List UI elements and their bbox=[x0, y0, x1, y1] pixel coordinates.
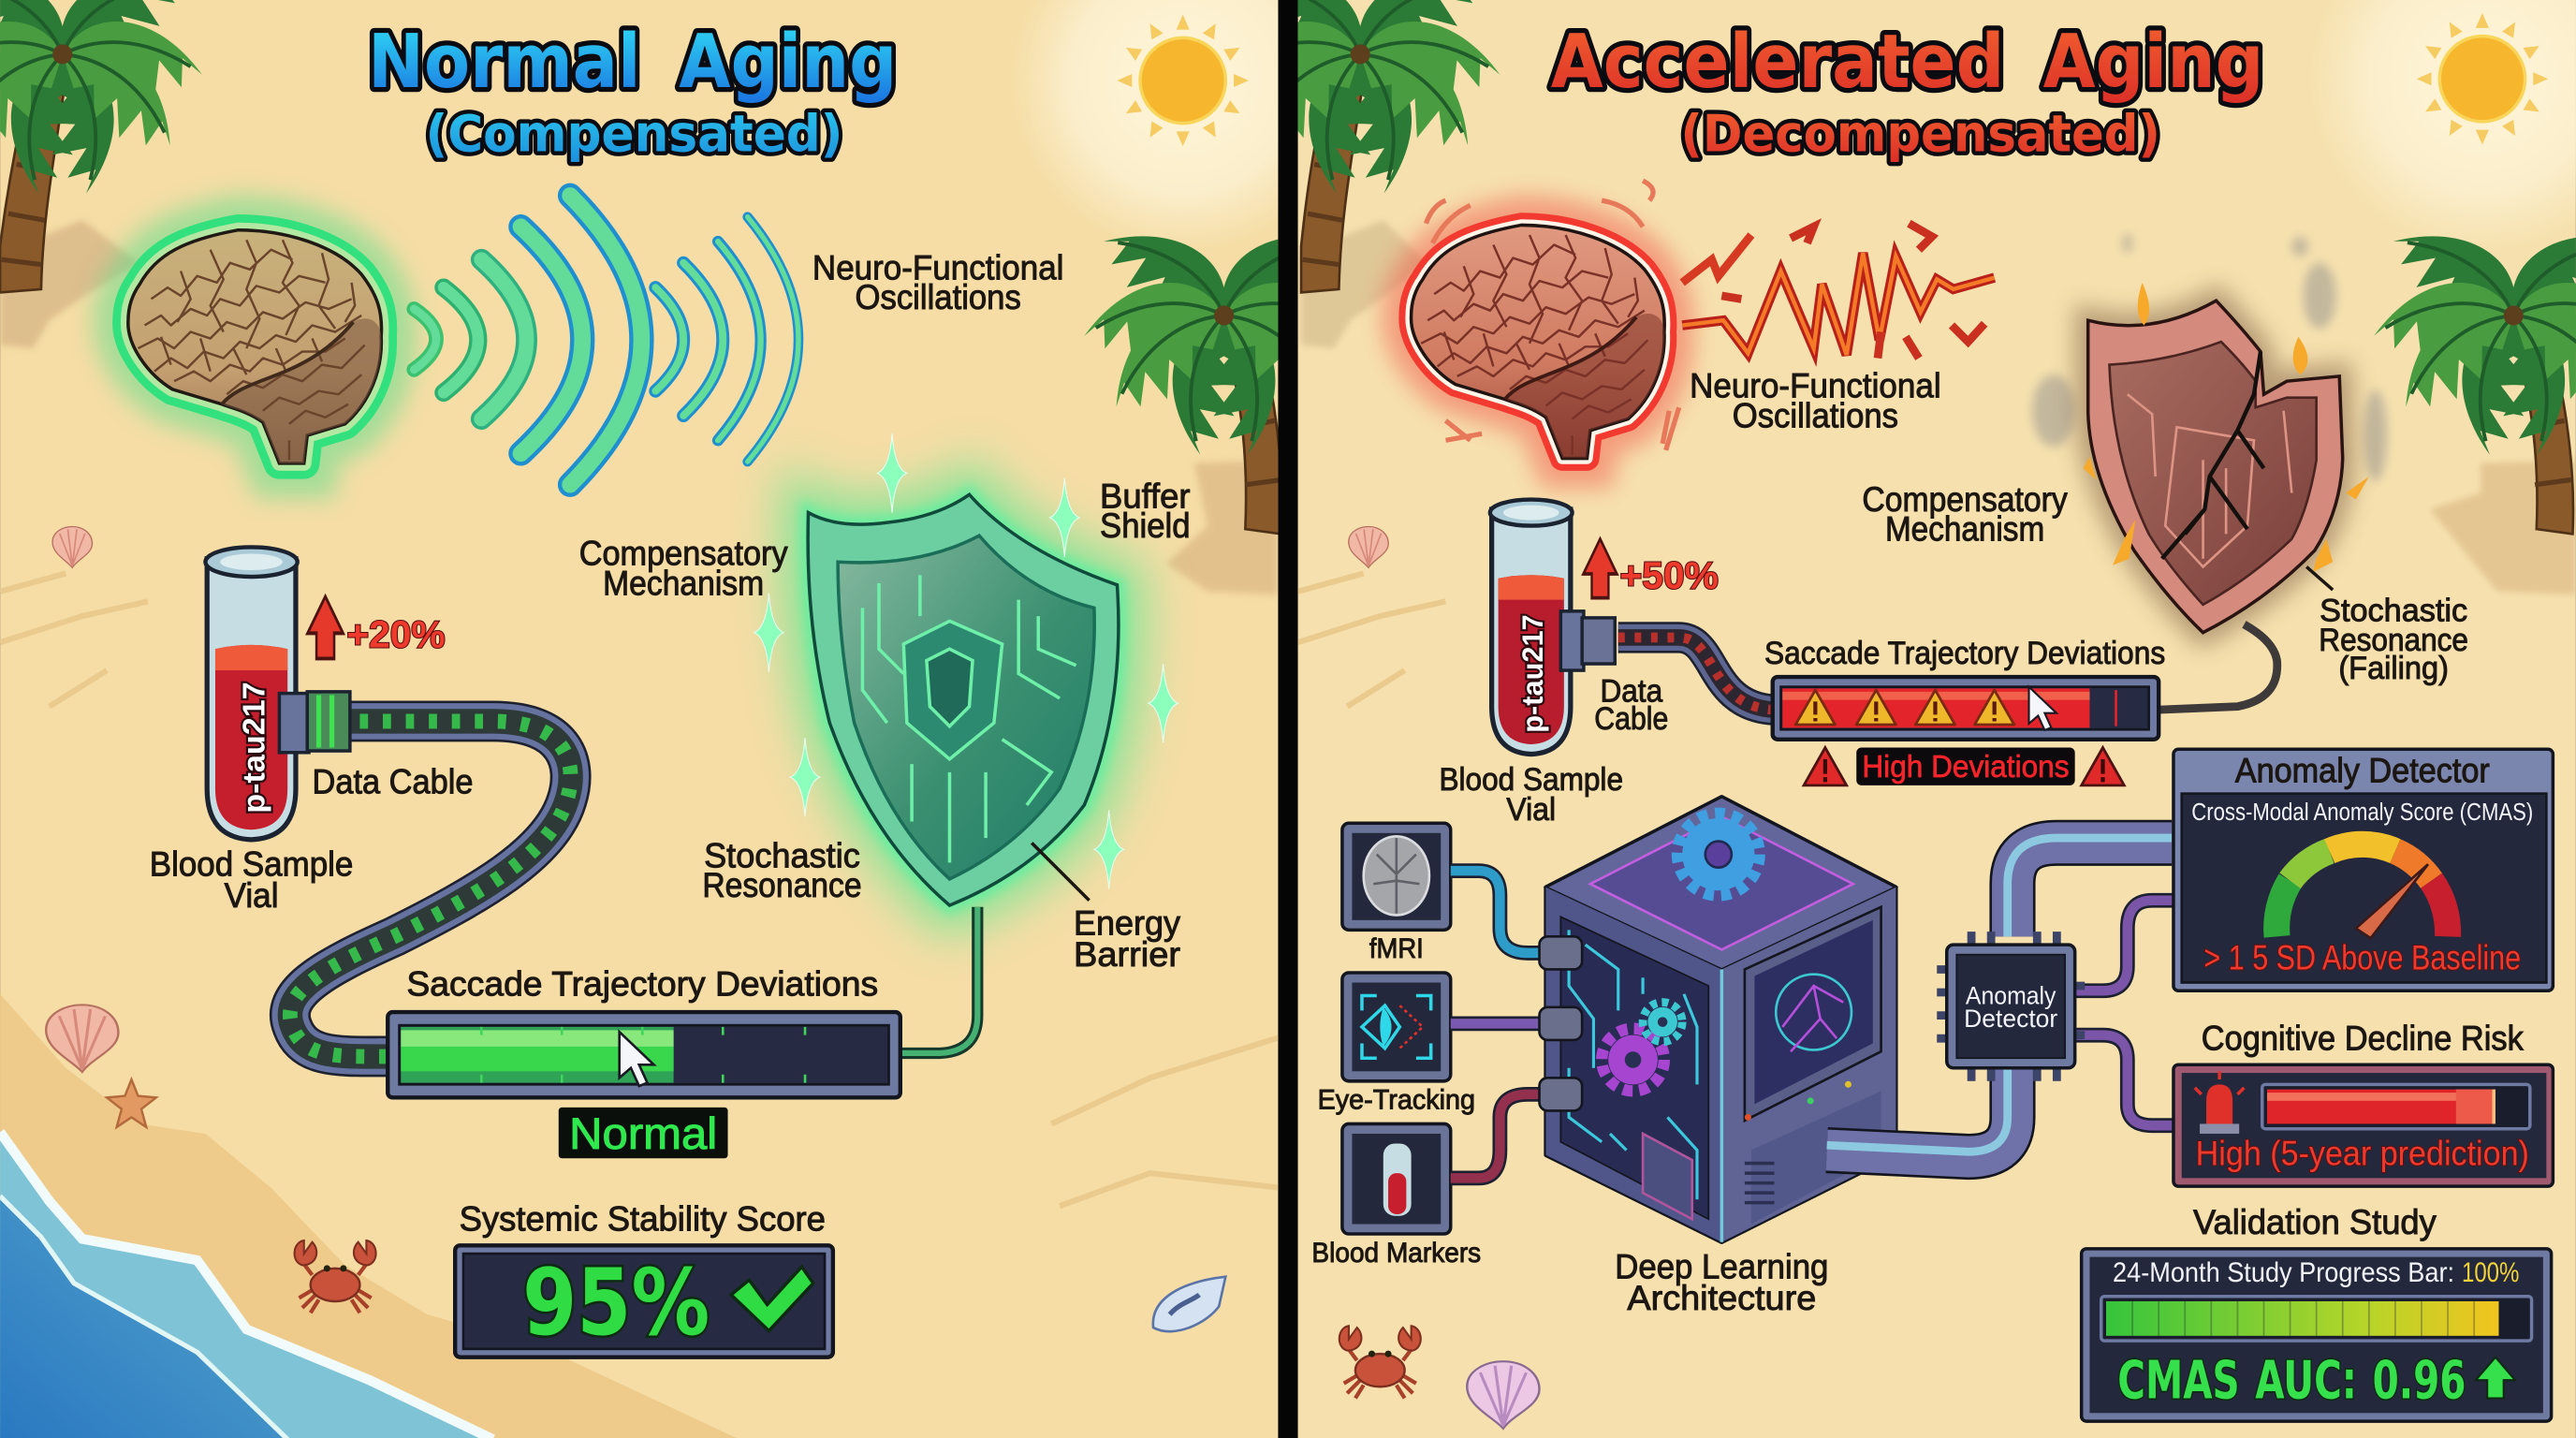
label: stochastic resonance: Resonance bbox=[702, 866, 862, 904]
gauge needle bbox=[2356, 864, 2428, 938]
icon: anomaly detector chip bbox=[1937, 932, 2085, 1081]
label: compensatory mechanism: Compensatory bbox=[1862, 480, 2068, 519]
label: stochastic resonance bbox=[704, 842, 861, 898]
callout: plus 20 percent: +20% bbox=[346, 612, 446, 655]
icon: lilac shell bbox=[1467, 1361, 1540, 1429]
subtitle: decompensated: (Decompensated) bbox=[1680, 104, 2160, 163]
panel: normal aging bbox=[0, 0, 1365, 1438]
icon: healthy brain with green glow bbox=[128, 230, 382, 463]
icon: crab bbox=[1339, 1326, 1421, 1399]
label: neuro-functional oscillations bbox=[814, 254, 1061, 310]
badge: high deviations bbox=[1804, 748, 2124, 785]
chart: smooth oscillation waves bbox=[414, 196, 798, 485]
subtitle: compensated: (Compensated) bbox=[426, 104, 842, 163]
label: deep learning architecture bbox=[1615, 1247, 1828, 1317]
pipes: cube to chip to panel bbox=[1827, 838, 2172, 1157]
label: compensatory mechanism bbox=[580, 540, 788, 595]
label: blood markers: Blood Markers bbox=[1311, 1238, 1481, 1269]
label: data cable bbox=[1594, 673, 1668, 737]
icon: sun bbox=[2310, 0, 2576, 252]
label: neuro-functional oscillations: Neuro-Functional bbox=[812, 248, 1063, 286]
label: compensatory mechanism: Compensatory bbox=[579, 535, 788, 573]
icon: data cable bbox=[1618, 638, 1774, 710]
wires: chip to outputs bbox=[2075, 901, 2175, 1125]
icon: eye tracking input bbox=[1342, 973, 1451, 1081]
icon: palm tree right bbox=[2373, 198, 2576, 534]
icon: blood sample vial: p-tau217 bbox=[238, 682, 272, 814]
label: blood sample vial: Blood Sample bbox=[1439, 762, 1623, 798]
label: energy barrier bbox=[1076, 910, 1181, 967]
callout: plus 50 percent: +50% bbox=[1620, 553, 1719, 596]
title: accelerated aging: Accelerated Aging bbox=[1551, 19, 2263, 105]
label: compensatory mechanism: Mechanism bbox=[1885, 509, 2044, 548]
label: blood sample vial bbox=[1439, 762, 1623, 828]
wire: bar to failing shield bbox=[2159, 624, 2277, 710]
panel: anomaly detector: > 1 5 SD Above Baseline bbox=[2203, 938, 2521, 976]
label: data cable: Data Cable bbox=[313, 763, 474, 801]
label: compensatory mechanism: Mechanism bbox=[603, 564, 764, 602]
control vents bbox=[1745, 1081, 1881, 1224]
cube ports bbox=[1540, 936, 1582, 1110]
chart: erratic oscillation waves bbox=[1682, 224, 1995, 359]
label: deep learning architecture: Architecture bbox=[1627, 1279, 1816, 1317]
wire: bar to shield bbox=[900, 907, 977, 1053]
icon: small shell bbox=[1349, 527, 1388, 567]
bar: saccade deviations normal bbox=[388, 1012, 900, 1097]
icon: top blue gear bbox=[1677, 814, 1760, 895]
callout: plus 50 percent bbox=[1584, 539, 1719, 598]
icon: cracked failing shield bbox=[2088, 301, 2343, 633]
label: blood sample vial: Blood Sample bbox=[150, 844, 353, 883]
label: fmri: fMRI bbox=[1369, 933, 1424, 964]
icon: smoke bbox=[2032, 233, 2387, 481]
icon: spiral shell bbox=[1153, 1277, 1225, 1331]
icon: vibration marks around brain bbox=[1426, 181, 1679, 450]
label: compensatory mechanism bbox=[1862, 480, 2068, 548]
label: systemic stability score: Systemic Stability Score bbox=[460, 1200, 826, 1239]
label: stochastic resonance failing: Resonance bbox=[2319, 623, 2468, 658]
icon: blood sample vial bbox=[205, 547, 298, 840]
icon: anomaly detector chip: Detector bbox=[1964, 1004, 2057, 1033]
label: blood sample vial: Vial bbox=[225, 876, 279, 915]
icon: cyan gear bbox=[1643, 1003, 1682, 1042]
label: buffer shield: Buffer bbox=[1100, 477, 1191, 515]
bar: saccade deviations high bbox=[1773, 677, 2159, 740]
callout: plus 20 percent bbox=[308, 596, 446, 658]
label: saccade trajectory deviations: Saccade Trajectory Deviations bbox=[1764, 636, 2165, 671]
circuits on left face bbox=[1569, 930, 1697, 1199]
icon: energy sparkles bbox=[754, 433, 1178, 888]
icon: alarm siren bbox=[2195, 1071, 2244, 1134]
chart: gauge bbox=[2276, 844, 2448, 936]
label: blood sample vial: Vial bbox=[1506, 792, 1556, 828]
icon: palm tree top left bbox=[1220, 0, 1501, 292]
icon: purple gear bbox=[1602, 1029, 1664, 1091]
panel: validation study: 100% bbox=[2462, 1257, 2519, 1288]
label: data cable: Cable bbox=[1594, 701, 1668, 737]
label: validation study: Validation Study bbox=[2193, 1203, 2437, 1241]
label: neuro-functional oscillations: Neuro-Functional bbox=[1690, 367, 1941, 405]
icon: data cable bbox=[290, 721, 571, 1056]
label: eye-tracking: Eye-Tracking bbox=[1318, 1085, 1475, 1116]
panel: stability score bbox=[455, 1245, 833, 1357]
label: stochastic resonance failing: Stochastic bbox=[2320, 593, 2467, 628]
label: deep learning architecture: Deep Learning bbox=[1615, 1247, 1828, 1285]
badge: normal: Normal bbox=[569, 1109, 717, 1159]
sand ripples and shadows bbox=[1298, 220, 2576, 707]
icon: starfish bbox=[107, 1079, 156, 1127]
icon: cable connector bbox=[1560, 611, 1615, 670]
leader line: energy barrier bbox=[1032, 843, 1090, 901]
chip on left face bbox=[1643, 1134, 1692, 1219]
label: neuro-functional oscillations: Oscillations bbox=[856, 278, 1021, 316]
title: normal aging: Normal Aging bbox=[368, 19, 897, 105]
icon: blood markers input bbox=[1342, 1123, 1451, 1234]
icon: cable connector bbox=[279, 692, 350, 753]
icon: blood sample vial bbox=[1490, 500, 1573, 755]
sand ripples and shadows bbox=[0, 220, 1281, 1206]
label: energy barrier: Barrier bbox=[1074, 935, 1180, 974]
panel: accelerated aging bbox=[1220, 0, 2576, 1438]
icon: crab bbox=[295, 1240, 376, 1313]
label: cognitive decline risk: Cognitive Decline Risk bbox=[2202, 1019, 2524, 1057]
label: saccade trajectory deviations: Saccade Trajectory Deviations bbox=[406, 965, 878, 1004]
panel: stability score: 95% bbox=[522, 1250, 710, 1357]
icon: large pink shell bbox=[46, 1005, 118, 1072]
panel: anomaly detector bbox=[2174, 749, 2553, 990]
leader line: stochastic resonance bbox=[2306, 566, 2333, 590]
icon: sun bbox=[1024, 0, 1279, 240]
label: energy barrier: Energy bbox=[1074, 904, 1181, 943]
divider bbox=[1278, 0, 1298, 1438]
label: neuro-functional oscillations bbox=[1690, 367, 1941, 434]
panel: anomaly detector: Anomaly Detector bbox=[2235, 751, 2490, 789]
icon: fmri input bbox=[1342, 823, 1451, 930]
icon: palm tree right bbox=[1084, 236, 1279, 536]
panel: validation study: 24-Month Study Progress Bar: bbox=[2113, 1257, 2454, 1288]
icon: stressed brain with red glow bbox=[1412, 225, 1664, 459]
label: stochastic resonance failing: (Failing) bbox=[2338, 651, 2449, 686]
label: neuro-functional oscillations: Oscillations bbox=[1733, 396, 1898, 434]
wires: inputs to cube bbox=[1451, 871, 1553, 1178]
panel: cognitive decline risk: High (5-year prediction) bbox=[2196, 1134, 2529, 1172]
icon: blood sample vial: p-tau217 bbox=[1515, 614, 1549, 733]
beach and water bbox=[0, 994, 739, 1438]
icon: small pink shell bbox=[52, 527, 93, 567]
icon: buffer shield bbox=[808, 494, 1119, 905]
badge: high deviations: High Deviations bbox=[1862, 750, 2070, 785]
label: data cable: Data bbox=[1600, 673, 1663, 709]
panel: cognitive decline risk bbox=[2174, 1064, 2553, 1186]
label: stochastic resonance: Stochastic bbox=[704, 837, 860, 875]
label: blood sample vial bbox=[152, 850, 352, 908]
screen on right face bbox=[1745, 907, 1881, 1121]
icon: palm tree top left bbox=[0, 0, 203, 292]
diagram: deep learning cube bbox=[1546, 797, 1895, 1242]
label: buffer shield bbox=[1101, 482, 1191, 538]
icon: anomaly detector chip: Anomaly bbox=[1966, 980, 2056, 1009]
panel: validation study bbox=[2082, 1249, 2552, 1421]
icon: flames and sparks bbox=[2083, 283, 2369, 572]
label: stochastic resonance failing bbox=[2319, 593, 2468, 686]
label: buffer shield: Shield bbox=[1100, 506, 1191, 545]
